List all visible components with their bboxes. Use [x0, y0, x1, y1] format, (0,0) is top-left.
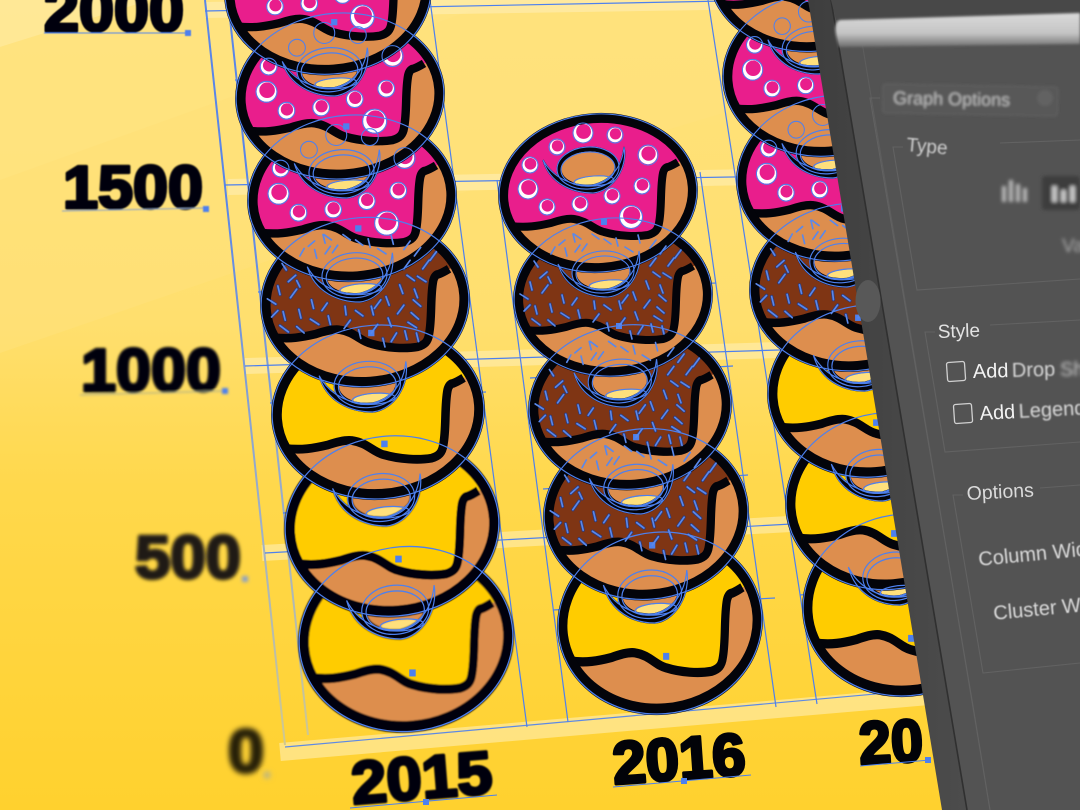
donut: yellow 2 — [273, 401, 511, 620]
donut: yellow 3 — [260, 291, 496, 503]
donut: yellow 1 — [287, 510, 525, 736]
axis label: 1500: 1500 — [63, 154, 203, 221]
heading: Type: Type — [906, 135, 948, 160]
donut: yellow 1 — [792, 478, 1018, 700]
donut: pink 3 — [698, 0, 922, 55]
chart axes and grid lines — [205, 0, 920, 747]
icon: column chart types — [1002, 176, 1080, 210]
tab: Graph Options: Graph Options — [893, 88, 1010, 110]
axis label: 500: 500 — [135, 524, 241, 591]
vector path overlay: selected artwork outlines — [220, 0, 1012, 739]
donut: pink 1 — [236, 83, 468, 285]
donut: chocolate — [739, 170, 965, 374]
donut: yellow 2 — [775, 378, 1001, 593]
donut column: 2015 — [214, 0, 525, 736]
title bar — [835, 13, 1080, 47]
panel: Graph Options dialog — [808, 0, 1080, 810]
donut: pink 2 — [224, 0, 456, 183]
panel body — [831, 0, 1080, 810]
donut: chocolate 3 — [503, 187, 723, 380]
donut: pink 3 — [214, 0, 442, 78]
donut column: 2017 — [698, 0, 1018, 700]
donut: pink 2 — [712, 0, 936, 160]
donut: chocolate 2 — [518, 293, 742, 493]
option: Add Legend: Add — [979, 401, 1016, 425]
option: Add Drop Shadow: Drop — [1012, 359, 1055, 382]
axis label: 0: 0 — [228, 718, 264, 785]
donut: pink — [488, 83, 708, 276]
category label: 2017 partly hidden: 20 — [857, 707, 925, 777]
scroll nub — [856, 280, 880, 322]
option: Add Legend — [953, 398, 1080, 425]
donut: chocolate — [250, 184, 480, 390]
donut: pink 1 — [726, 63, 950, 265]
tab: Graph Options — [882, 84, 1058, 116]
option: Add Drop Shadow — [946, 359, 1080, 383]
donut: yellow — [547, 496, 773, 718]
donut: yellow 3 — [757, 271, 983, 481]
donut column: 2016 — [488, 83, 773, 718]
axis label: 1000: 1000 — [81, 337, 221, 404]
donut: chocolate 1 — [533, 395, 759, 603]
category label: 2016: 2016 — [610, 721, 748, 797]
heading: Options: Options — [966, 479, 1035, 505]
frame lines — [870, 98, 1080, 810]
panel edge strip — [808, 0, 1080, 810]
heading: Style: Style — [937, 321, 980, 343]
grid bands: pale gridline shadows — [205, 0, 940, 752]
option: Add Drop Shadow: Add — [973, 360, 1009, 383]
